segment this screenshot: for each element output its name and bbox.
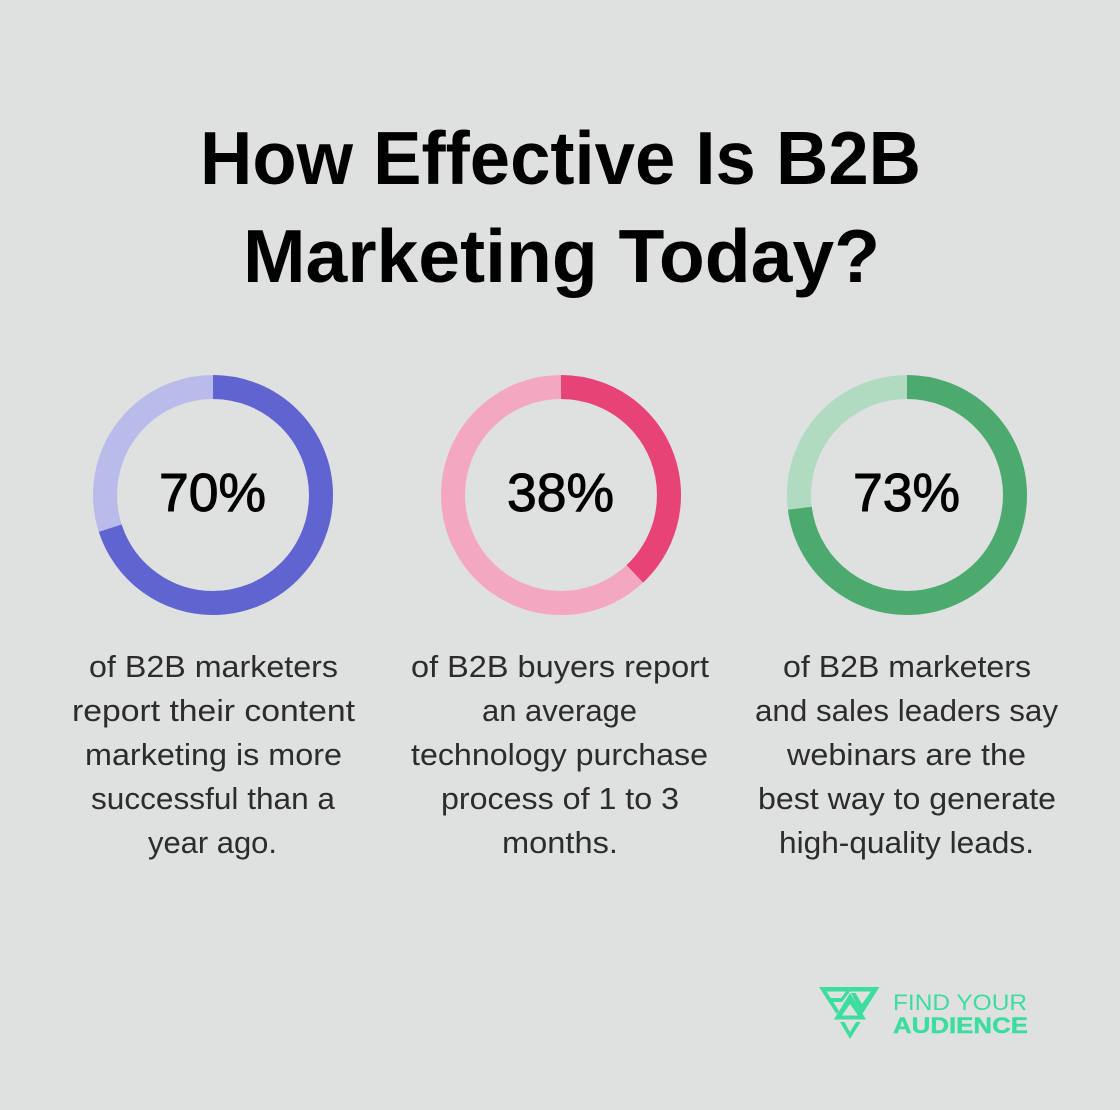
description: webinars: best way to generate [758, 781, 1056, 816]
description: webinars: webinars are the [786, 737, 1026, 772]
description: content marketing: successful than a [91, 781, 336, 816]
description: webinars: and sales leaders say [755, 693, 1059, 728]
logo wordmark [893, 990, 1028, 1038]
logo: Find Your Audience [819, 987, 1028, 1039]
description: content marketing: of B2B marketers [89, 649, 338, 684]
title [200, 116, 921, 298]
description: webinars [755, 649, 1059, 860]
value: 70%: 70% [159, 463, 266, 523]
description: purchase process: technology purchase [411, 737, 708, 772]
panel: 38% statistic [411, 387, 709, 860]
icon: triangle logo mark [819, 987, 880, 1039]
panel: 70% statistic [72, 387, 355, 860]
title: How Effective Is B2B [200, 116, 921, 200]
description: purchase process: an average [482, 693, 637, 728]
donut chart: 73% [799, 387, 1015, 603]
description: content marketing: year ago. [148, 825, 277, 860]
description: webinars: high-quality leads. [779, 825, 1034, 860]
donut chart: 38% [453, 387, 669, 603]
title: Marketing Today? [243, 214, 880, 298]
description: purchase process: months. [502, 825, 618, 860]
description: content marketing [72, 649, 355, 860]
value: 38%: 38% [507, 463, 614, 523]
logo wordmark: FIND YOUR [893, 990, 1027, 1015]
logo wordmark: AUDIENCE [893, 1013, 1028, 1038]
description: content marketing: marketing is more [85, 737, 342, 772]
description: webinars: of B2B marketers [783, 649, 1031, 684]
description: purchase process: process of 1 to 3 [441, 781, 679, 816]
description: purchase process [411, 649, 709, 860]
panel: 73% statistic [755, 387, 1059, 860]
donut chart: 70% [105, 387, 321, 603]
description: content marketing: report their content [72, 693, 355, 728]
value: 73%: 73% [853, 463, 960, 523]
description: purchase process: of B2B buyers report [411, 649, 709, 684]
